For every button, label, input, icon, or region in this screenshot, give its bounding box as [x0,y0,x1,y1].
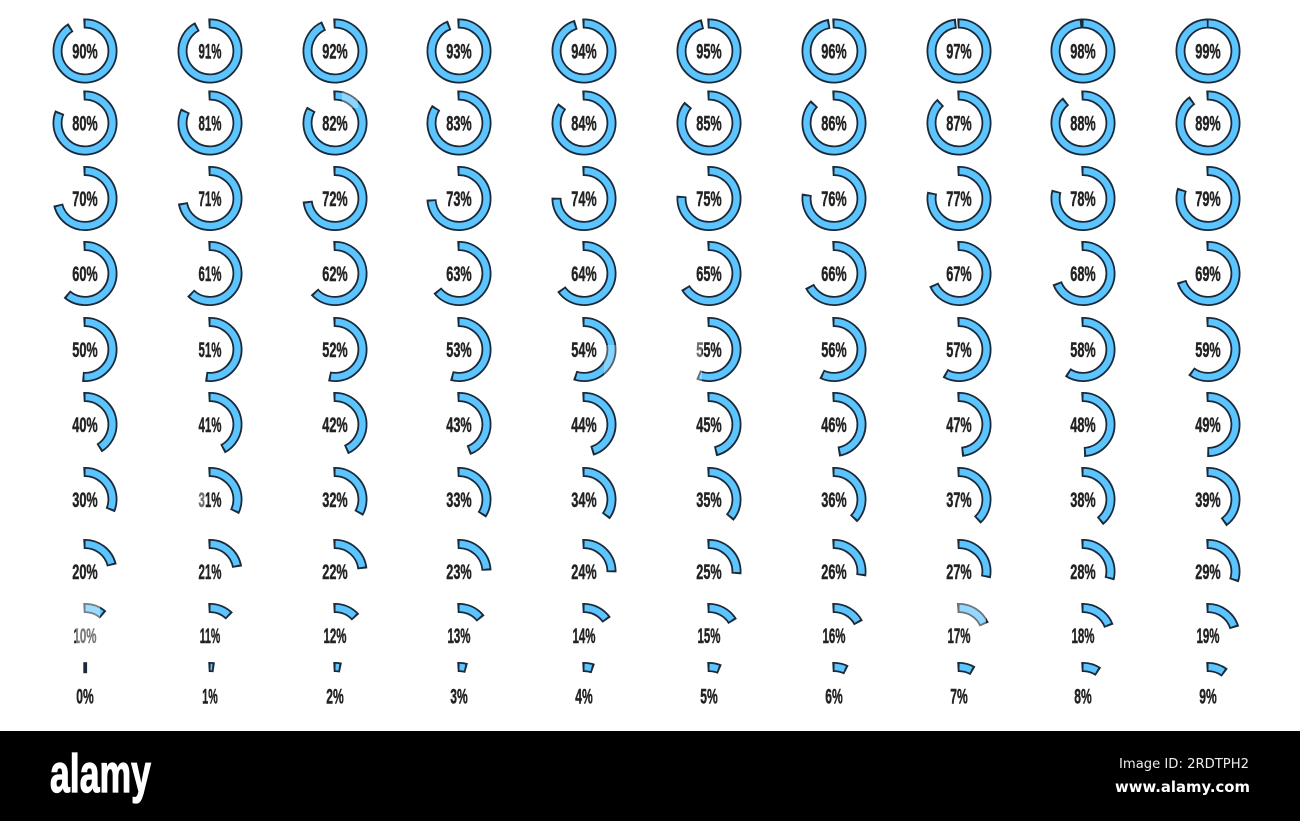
gauge: 30%: 30% [72,488,98,512]
gauge: 68% [1054,245,1112,302]
gauge: 87%: 87% [946,112,972,136]
gauge: 10% [56,607,114,664]
gauge: 50%: 50% [72,338,98,362]
gauge: 45% [680,396,738,453]
gauge: 6%: 6% [825,684,843,708]
gauge: 32% [306,471,364,528]
gauge: 88%: 88% [1070,112,1096,136]
gauge: 38% [1054,471,1112,528]
image id: Image ID: 2RDTPH2 [1119,756,1249,772]
gauge: 93% [430,22,488,80]
gauge: 77% [930,170,988,227]
gauge: 75% [680,170,738,227]
gauge: 25%: 25% [696,560,722,584]
gauge: 89% [1179,94,1237,152]
gauge: 60%: 60% [72,262,98,286]
gauge: 89%: 89% [1195,112,1221,136]
alamy logo: alamy [50,744,151,804]
gauge: 70% [56,170,114,227]
gauge: 66% [805,245,863,302]
gauge: 20% [56,543,114,600]
gauge: 87% [930,94,988,152]
gauge: 7%: 7% [950,684,968,708]
gauge: 99% [1179,22,1237,80]
gauge: 74% [555,170,613,227]
gauge: 99%: 99% [1195,40,1221,64]
gauge: 40%: 40% [72,413,98,437]
gauge: 75%: 75% [696,187,722,211]
gauge: 5%: 5% [700,684,718,708]
gauge: 41% [181,396,239,453]
gauge: 14%: 14% [572,624,596,648]
gauge: 0%: 0% [76,684,94,708]
gauge: 98% [1054,22,1112,80]
gauge: 6% [805,666,863,723]
gauge: 78% [1054,170,1112,227]
gauge: 66%: 66% [821,262,847,286]
gauge: 25% [680,543,738,600]
gauge: 60% [56,245,114,302]
gauge: 0% [76,662,94,708]
gauge: 11%: 11% [200,624,220,648]
gauge: 36%: 36% [821,488,847,512]
gauge: 54%: 54% [571,338,597,362]
gauge: 43% [430,396,488,453]
gauge: 95%: 95% [696,40,722,64]
gauge: 9% [1179,666,1237,723]
gauge: 9%: 9% [1199,684,1217,708]
gauge: 50% [56,321,114,378]
gauge: 79% [1179,170,1237,227]
gauge: 71% [181,170,239,227]
gauge: 63%: 63% [446,262,472,286]
gauge: 18% [1054,607,1112,664]
gauge: 57%: 57% [946,338,972,362]
gauge: 45%: 45% [696,413,722,437]
gauge: 93%: 93% [446,40,472,64]
gauge: 82% [306,94,364,152]
gauge: 85%: 85% [696,112,722,136]
gauge: 97% [930,22,988,80]
gauge: 8% [1054,666,1112,723]
gauge: 48% [1054,396,1112,453]
gauge: 77%: 77% [946,187,972,211]
gauge: 76%: 76% [821,187,847,211]
gauge: 55% [680,321,738,378]
gauge: 41%: 41% [198,413,222,437]
gauge: 72%: 72% [322,187,348,211]
gauge: 46% [805,396,863,453]
gauge: 16% [805,607,863,664]
gauge: 54% [555,321,613,378]
gauge: 55%: 55% [696,338,722,362]
gauge: 13% [430,607,488,664]
gauge: 15% [680,607,738,664]
gauge: 17%: 17% [948,624,970,648]
gauge: 62% [306,245,364,302]
gauge: 49% [1179,396,1237,453]
gauge: 68%: 68% [1070,262,1096,286]
gauge: 2% [306,666,364,723]
gauge: 95% [680,22,738,80]
gauge: 88% [1054,94,1112,152]
gauge: 33% [430,471,488,528]
gauge: 38%: 38% [1070,488,1096,512]
gauge: 23% [430,543,488,600]
gauge: 59% [1179,321,1237,378]
gauge: 64%: 64% [571,262,597,286]
gauge: 91%: 91% [198,40,222,64]
gauge: 92%: 92% [322,40,348,64]
gauge: 83% [430,94,488,152]
gauge: 76% [805,170,863,227]
gauge: 86%: 86% [821,112,847,136]
gauge: 34%: 34% [571,488,597,512]
gauge: 15%: 15% [698,624,720,648]
gauge: 49%: 49% [1195,413,1221,437]
gauge: 80%: 80% [72,112,98,136]
gauge: 52%: 52% [322,338,348,362]
gauge: 47% [930,396,988,453]
gauge: 90%: 90% [72,40,98,64]
gauge: 28%: 28% [1070,560,1096,584]
gauge: 26% [805,543,863,600]
gauge: 30% [56,471,114,528]
gauge: 28% [1054,543,1112,600]
gauge: 35% [680,471,738,528]
gauge: 85% [680,94,738,152]
gauge: 46%: 46% [821,413,847,437]
gauge: 70%: 70% [72,187,98,211]
gauge: 58% [1054,321,1112,378]
gauge: 73%: 73% [446,187,472,211]
gauge: 73% [430,170,488,227]
gauge: 80% [56,94,114,152]
gauge: 32%: 32% [322,488,348,512]
gauge: 7% [930,666,988,723]
gauge: 4% [555,666,613,723]
gauge: 48%: 48% [1070,413,1096,437]
gauge: 10%: 10% [74,624,96,648]
gauge: 78%: 78% [1070,187,1096,211]
gauge: 47%: 47% [946,413,972,437]
gauge: 19%: 19% [1196,624,1220,648]
gauge: 69%: 69% [1195,262,1221,286]
gauge: 90% [56,22,114,80]
gauge: 12% [306,607,364,664]
gauge: 23%: 23% [446,560,472,584]
gauge: 65% [680,245,738,302]
gauge: 92% [306,22,364,80]
gauge: 67%: 67% [946,262,972,286]
gauge: 24%: 24% [571,560,597,584]
gauge: 3% [430,666,488,723]
gauge: 96% [805,22,863,80]
gauge: 79%: 79% [1195,187,1221,211]
gauge: 22%: 22% [322,560,348,584]
gauge: 22% [306,543,364,600]
gauge: 3%: 3% [450,684,468,708]
gauge: 82%: 82% [322,112,348,136]
gauge: 67% [930,245,988,302]
gauge: 13%: 13% [448,624,470,648]
gauge: 1% [181,666,239,723]
gauge: 71%: 71% [198,187,222,211]
gauge: 91% [181,22,239,80]
gauge: 39% [1179,471,1237,528]
gauge: 81% [181,94,239,152]
gauge: 51% [181,321,239,378]
gauge: 98%: 98% [1070,40,1096,64]
gauge: 16%: 16% [822,624,846,648]
gauge: 40% [56,396,114,453]
gauge: 21%: 21% [198,560,222,584]
gauge: 61% [181,245,239,302]
gauge: 5% [680,666,738,723]
gauge: 37%: 37% [946,488,972,512]
gauge: 18%: 18% [1072,624,1094,648]
gauge: 96%: 96% [821,40,847,64]
gauge: 14% [555,607,613,664]
gauge: 12%: 12% [324,624,346,648]
gauge: 31% [181,471,239,528]
gauge: 8%: 8% [1074,684,1092,708]
gauge: 37% [930,471,988,528]
gauge: 11% [181,607,239,664]
gauge: 59%: 59% [1195,338,1221,362]
gauge: 29%: 29% [1195,560,1221,584]
gauge: 17% [930,607,988,664]
gauge: 34% [555,471,613,528]
gauge: 65%: 65% [696,262,722,286]
gauge: 69% [1179,245,1237,302]
gauge: 56%: 56% [821,338,847,362]
gauge: 81%: 81% [198,112,222,136]
gauge: 51%: 51% [198,338,222,362]
gauge: 44% [555,396,613,453]
gauge: 29% [1179,543,1237,600]
gauge: 84%: 84% [571,112,597,136]
gauge: 86% [805,94,863,152]
gauge: 24% [555,543,613,600]
website: www.alamy.com [1115,778,1250,796]
gauge: 97%: 97% [946,40,972,64]
gauge: 74%: 74% [571,187,597,211]
gauge: 31%: 31% [198,488,222,512]
gauge: 19% [1179,607,1237,664]
gauge: 36% [805,471,863,528]
gauge: 21% [181,543,239,600]
gauge: 1%: 1% [202,684,218,708]
gauge: 84% [555,94,613,152]
gauge: 58%: 58% [1070,338,1096,362]
gauge: 42%: 42% [322,413,348,437]
gauge: 44%: 44% [571,413,597,437]
gauge: 94%: 94% [571,40,597,64]
gauge: 53% [430,321,488,378]
gauge: 62%: 62% [322,262,348,286]
gauge: 20%: 20% [72,560,98,584]
gauge: 94% [555,22,613,80]
gauge: 35%: 35% [696,488,722,512]
gauge: 61%: 61% [198,262,222,286]
gauge: 39%: 39% [1195,488,1221,512]
gauge: 63% [430,245,488,302]
gauge: 42% [306,396,364,453]
gauge: 72% [306,170,364,227]
gauge: 43%: 43% [446,413,472,437]
watermark haze patches [76,92,986,646]
gauge: 4%: 4% [575,684,593,708]
gauge: 56% [805,321,863,378]
gauge: 57% [930,321,988,378]
gauge: 33%: 33% [446,488,472,512]
gauge: 26%: 26% [821,560,847,584]
gauge: 83%: 83% [446,112,472,136]
footer bar [0,731,1300,821]
gauge: 27% [930,543,988,600]
gauge: 27%: 27% [946,560,972,584]
gauge: 53%: 53% [446,338,472,362]
gauge: 64% [555,245,613,302]
gauge: 2%: 2% [326,684,344,708]
gauge: 52% [306,321,364,378]
